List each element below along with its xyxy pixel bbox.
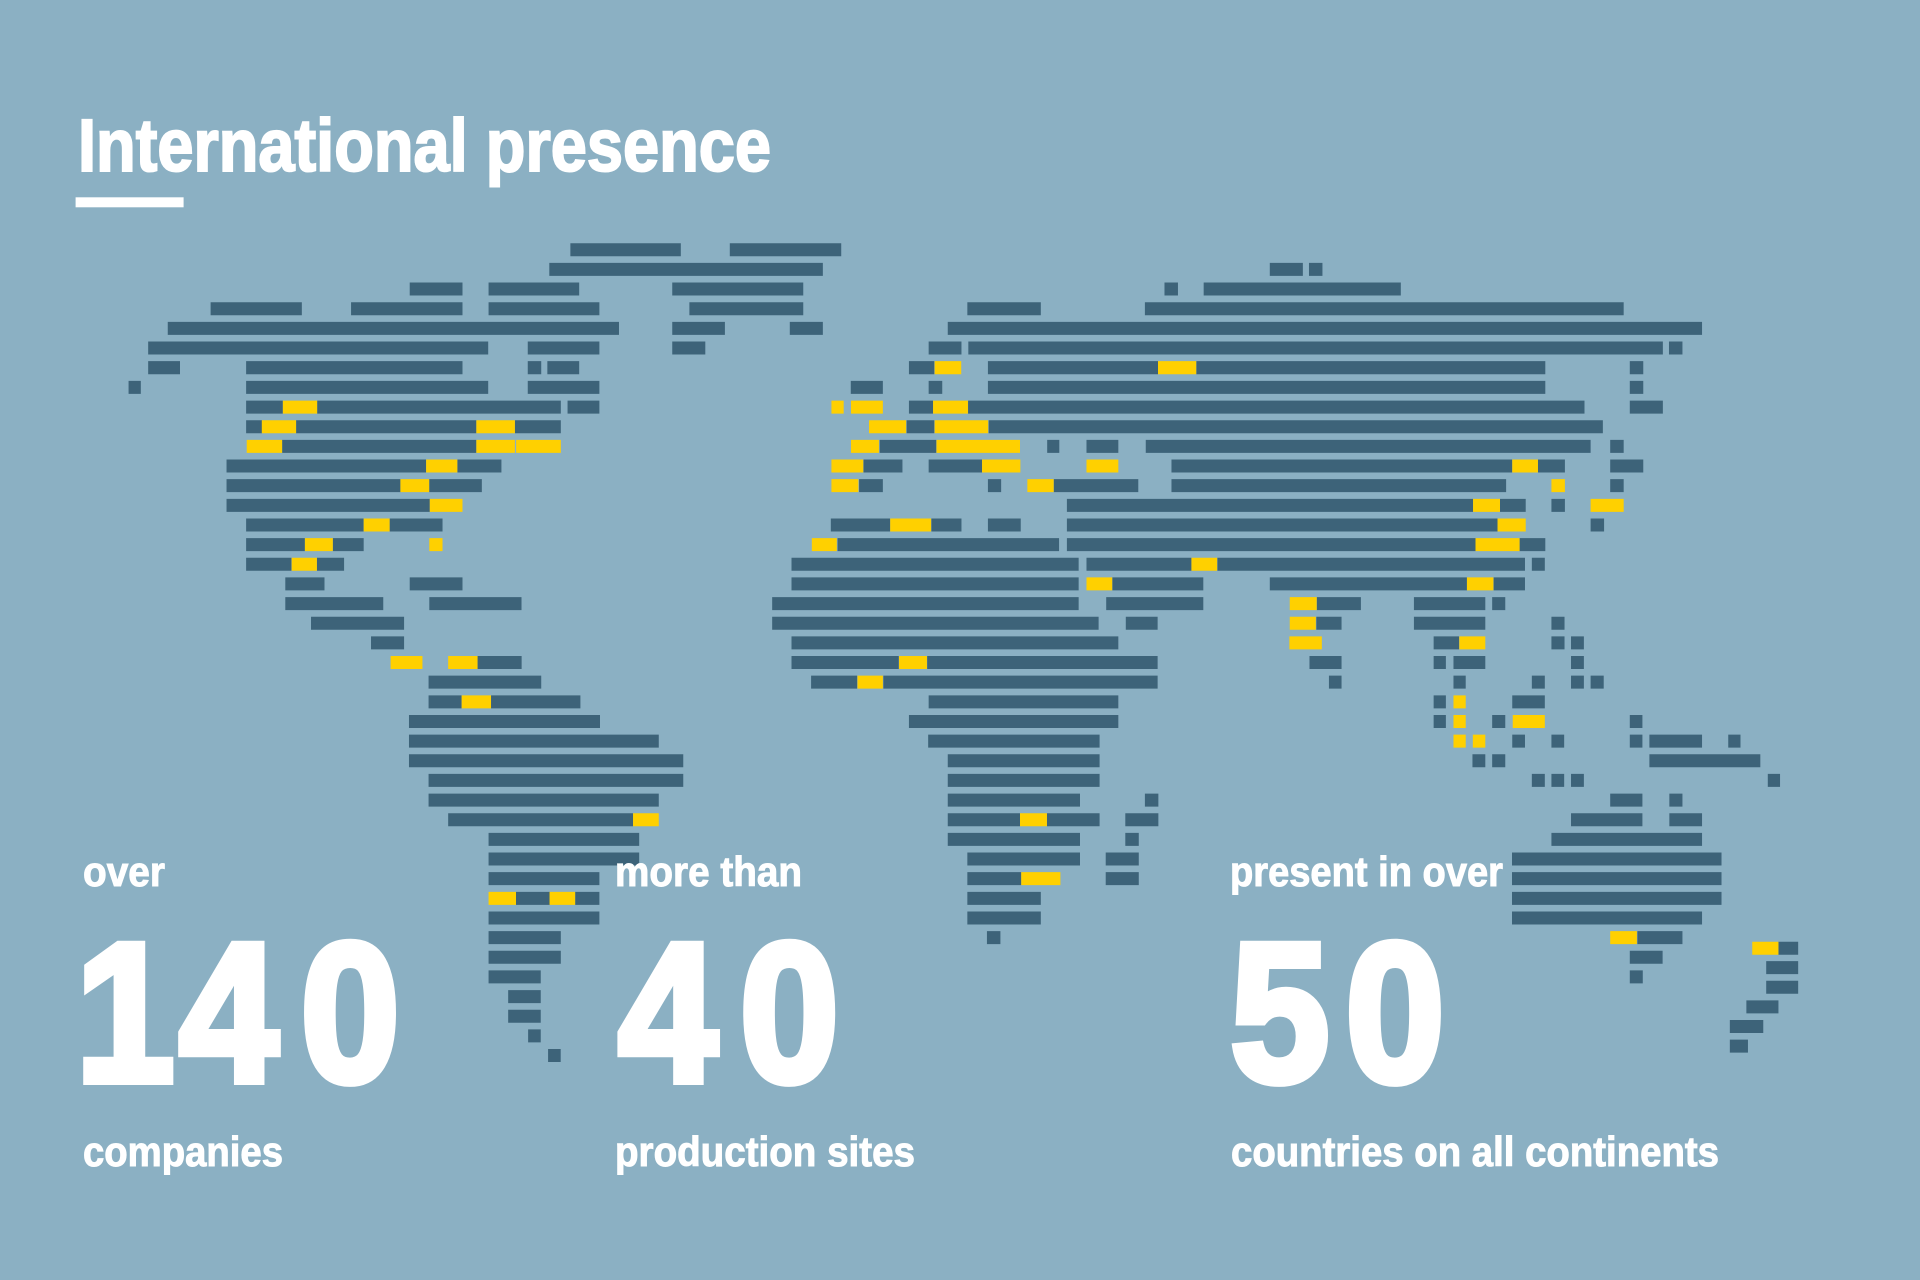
land bars: Oceania (1512, 721, 1798, 1046)
map region: Australia and Oceania (1512, 721, 1798, 1046)
land bars: Eurasia (831, 269, 1702, 780)
map region: Africa (772, 545, 1158, 938)
site markers: Africa (812, 545, 1112, 879)
map region: Europe and Asia (831, 269, 1702, 780)
title: International presence (78, 104, 771, 187)
stat number: 140 (76, 901, 400, 1123)
stat intro: present in over (1230, 848, 1503, 895)
stat number: 40 (618, 901, 839, 1123)
land bars: South America (409, 662, 683, 1056)
map region: North America and Greenland (129, 250, 841, 643)
world map (129, 250, 1798, 1056)
stat intro: more than (615, 848, 802, 895)
stat caption: companies (83, 1128, 283, 1175)
stat caption: production sites (615, 1128, 915, 1175)
stat intro: over (83, 848, 165, 895)
land bars: Africa (772, 545, 1158, 938)
stat: 50 countries (1230, 848, 1719, 1175)
map region: Central and South America (391, 662, 683, 1056)
stat caption: countries on all continents (1231, 1128, 1719, 1175)
site markers: North America (247, 407, 561, 564)
title underline (76, 197, 184, 207)
site markers: Eurasia (831, 368, 1624, 741)
stat: 140 companies (76, 848, 400, 1175)
stat number: 50 (1230, 901, 1445, 1123)
land bars: North America (129, 250, 841, 643)
site markers: South America (391, 662, 659, 898)
stat: 40 production sites (615, 848, 915, 1175)
site markers: Oceania (1610, 938, 1778, 948)
